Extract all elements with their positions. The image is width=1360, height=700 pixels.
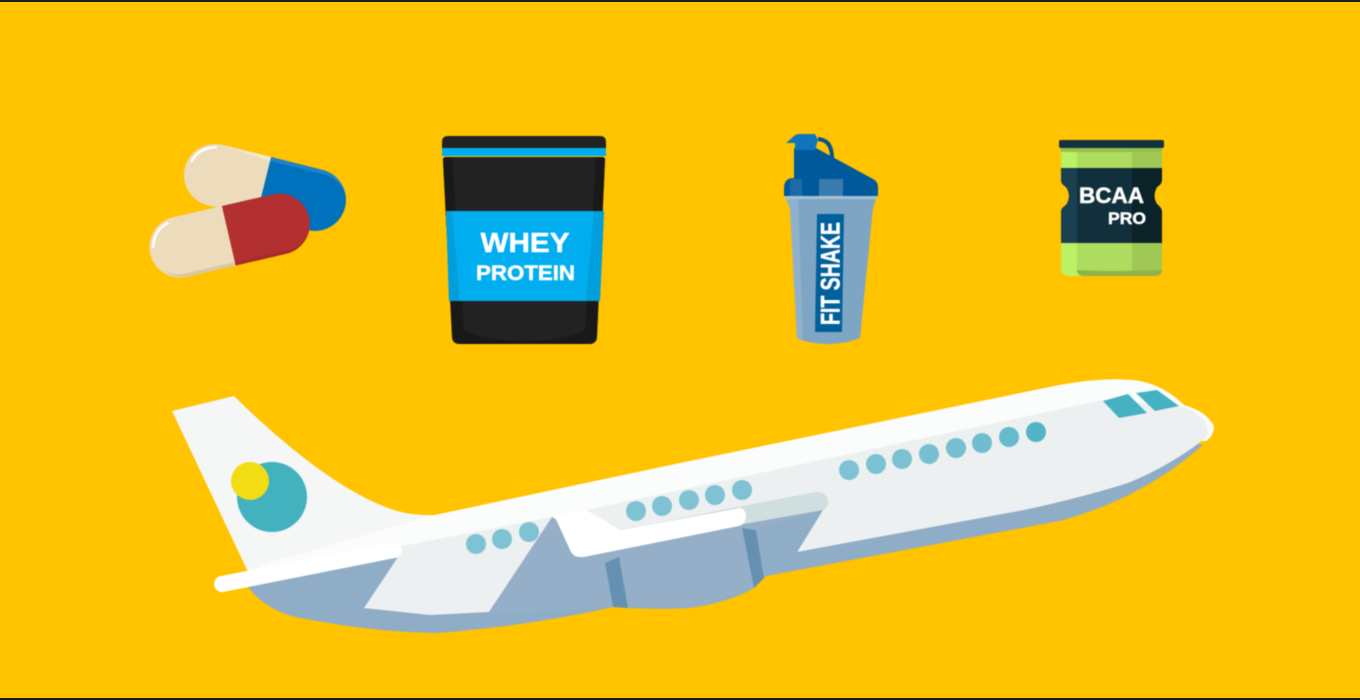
engine stripes: [605, 557, 628, 608]
far wing stripe: [738, 492, 828, 524]
tail logo: [231, 462, 307, 532]
windows: [466, 422, 1046, 554]
back pill: [177, 137, 353, 237]
icon: bcaa jar: PRO: [1108, 209, 1146, 228]
icon: bcaa jar: [1058, 140, 1165, 276]
tail fin: [172, 396, 440, 572]
wing root shadow: [489, 510, 823, 612]
icon: capsule pills: [143, 137, 353, 284]
icon: whey protein bag: PROTEIN: [476, 262, 575, 285]
icon: whey protein bag: [442, 136, 606, 344]
front pill: [143, 187, 316, 284]
fuselage body: [586, 400, 1208, 552]
illustration: airplane: [172, 379, 1214, 633]
bag label: WHEY: [480, 227, 570, 258]
tailplane: [222, 550, 394, 584]
icon: fit shake bottle: [784, 134, 878, 344]
cockpit windows: [1103, 390, 1179, 418]
belly: [246, 420, 1203, 633]
fuselage top: [258, 379, 1214, 578]
jar label: BCAA: [1079, 183, 1144, 208]
near wing: [554, 508, 746, 557]
bottle label: FIT SHAKE: [816, 222, 846, 325]
